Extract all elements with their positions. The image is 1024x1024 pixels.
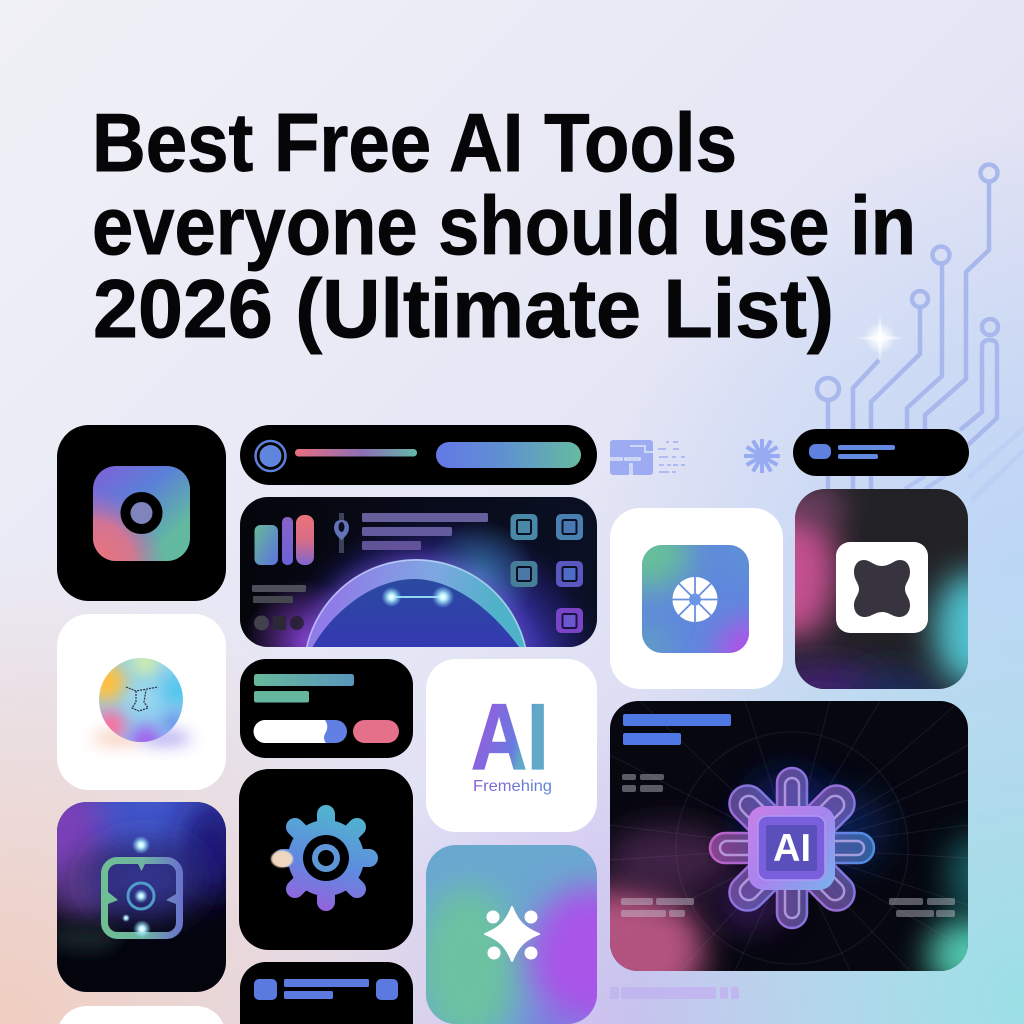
- icon: AI chip flower: [710, 768, 874, 928]
- card: gradient frame icon: [57, 802, 226, 992]
- caption placeholder bars: [610, 987, 739, 999]
- circuit lines decoration: [817, 164, 1024, 500]
- title: everyone should use in: [92, 179, 916, 272]
- card: gear icon: [239, 769, 413, 950]
- card: sphere: [57, 614, 226, 790]
- icon: four point star: [485, 907, 539, 961]
- title: Best Free AI Tools: [92, 96, 737, 189]
- grey status bars: [252, 585, 306, 630]
- heading bars: [623, 714, 731, 745]
- card: wheel icon: [606, 508, 783, 689]
- glowing nodes: [382, 586, 454, 608]
- icon: small node: [334, 513, 349, 553]
- panel: dashboard with dome: [240, 497, 597, 647]
- title: 2026 (Ultimate List): [93, 262, 834, 355]
- card: white bottom partial: [57, 1006, 226, 1024]
- icon: wheel: [672, 576, 718, 623]
- card: AI logo: [426, 659, 597, 832]
- pill: search bar: [240, 425, 597, 485]
- title: [92, 96, 916, 355]
- card: AI logo: AI: [471, 685, 549, 790]
- grey caption bars: [621, 774, 955, 917]
- constellation mark: [126, 687, 158, 711]
- deco: grid logo: [610, 440, 685, 475]
- bar chart icon: [254, 515, 314, 565]
- card: bottom list widget: [240, 962, 413, 1024]
- card: toggle widget: [240, 659, 413, 758]
- icon: rainbow orb: [99, 658, 183, 742]
- card: gradient star: [426, 845, 597, 1024]
- panel: AI chip: [610, 701, 968, 971]
- glass dome: [299, 548, 534, 647]
- sparkle: [856, 315, 904, 362]
- icon: asterisk: [744, 439, 780, 473]
- icon: AI chip flower: AI: [773, 827, 811, 870]
- text placeholder bars: [362, 513, 488, 550]
- pill: top right: [793, 429, 969, 476]
- card: AI logo: Fremehing: [473, 778, 552, 795]
- icon grid: [510, 514, 583, 633]
- icon: green frame: [104, 836, 180, 938]
- icon: white tile with blob: [836, 542, 928, 633]
- radial grid: [610, 701, 968, 971]
- card: black app icon with ring: [57, 425, 226, 601]
- card: dark gradient blob: [795, 489, 968, 689]
- icon: gear: [271, 814, 369, 902]
